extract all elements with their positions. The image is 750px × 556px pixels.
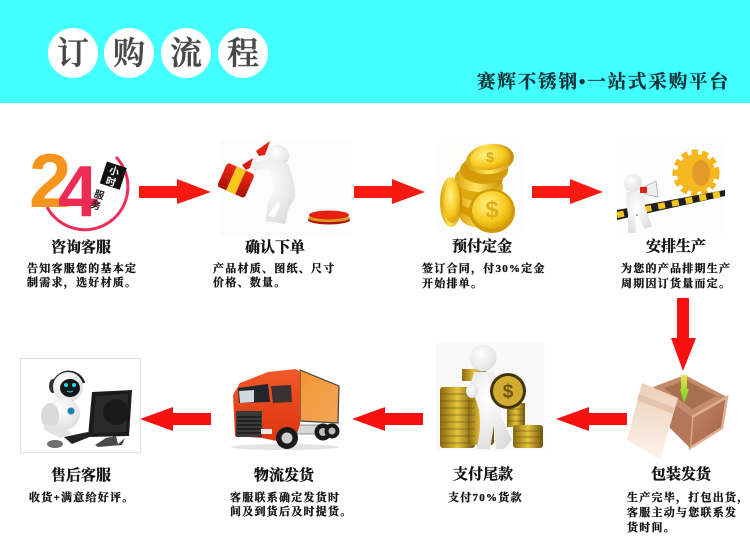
tagline: 赛辉不锈钢•一站式采购平台 [477, 71, 728, 93]
title: 包装发货 [651, 465, 713, 483]
step 7: 物流发货 [230, 369, 352, 518]
description: 开始排单。 [422, 276, 483, 290]
icon: gold coins [438, 141, 524, 233]
heading: 订购流程: 购 [113, 35, 145, 71]
heading: 订购流程: 订 [57, 35, 89, 71]
step 4: 安排生产 [617, 143, 731, 290]
step 6: 支付尾款 [436, 343, 545, 504]
icon: figure with coin stacks: $ [503, 382, 514, 402]
icon: gold coins: $ [486, 149, 494, 165]
icon: 24 hour service: 务 [89, 196, 103, 213]
description: 生产完毕，打包出货， [627, 490, 750, 504]
arrow [354, 179, 425, 204]
heading: 订购流程: 程 [227, 35, 259, 71]
description: 签订合同，付30%定金 [422, 261, 546, 275]
description: 客服主动与您联系发 [627, 505, 737, 519]
title: 预付定金 [452, 237, 512, 255]
arrow [556, 407, 627, 431]
icon: 24 hour service: 时 [104, 172, 118, 189]
icon: figure with hammer [217, 140, 352, 236]
icon: orange truck [231, 369, 340, 450]
step 2: 确认下单 [213, 140, 352, 289]
description: 产品材质、图纸、尺寸 [213, 261, 336, 275]
icon: 24 hour service: 小 [107, 162, 122, 179]
heading: 订购流程 [48, 28, 268, 78]
title: 物流发货 [254, 466, 316, 484]
step 3: 预付定金 [422, 141, 546, 290]
description: 收货+满意给好评。 [29, 490, 135, 504]
arrow [532, 179, 603, 204]
title: 售后客服 [51, 466, 111, 484]
description: 货时间。 [627, 520, 676, 534]
icon: figure with coin stacks [436, 343, 545, 451]
description [230, 490, 352, 518]
description [27, 261, 137, 289]
description [422, 261, 546, 290]
title: 咨询客服 [51, 238, 111, 256]
title: 支付尾款 [453, 465, 513, 483]
icon: wooden crate [627, 375, 727, 460]
heading: 订购流程: 流 [170, 35, 202, 71]
description: 制需求，选好材质。 [27, 275, 137, 289]
icon: green arrow [680, 375, 689, 403]
icon: 24 hour service [29, 139, 128, 232]
icon: robot at computer [20, 358, 140, 452]
title: 安排生产 [646, 237, 706, 255]
description [621, 261, 731, 290]
arrow: down [671, 298, 696, 371]
gear [676, 153, 716, 193]
title: 确认下单 [245, 238, 305, 256]
description: 为您的产品排期生产 [621, 261, 731, 275]
description: 支付70%货款 [448, 490, 523, 504]
icon: 24 hour service: 2 [29, 139, 71, 224]
arrow [352, 407, 423, 431]
arrow [139, 179, 211, 204]
description: 价格、数量。 [213, 275, 286, 289]
icon: gold coins: $ [485, 196, 499, 224]
icon: red button [308, 210, 350, 224]
header band [0, 0, 750, 103]
description: 客服联系确定发货时 [230, 490, 340, 504]
step 8: 售后客服 [20, 358, 140, 504]
icon: 24 hour service: 服 [92, 185, 107, 202]
icon: 24 hour service: 4 [58, 152, 98, 232]
icon: gear, hazard rail and figure with megaphone [617, 143, 725, 233]
description: 告知客服您的基本定 [27, 261, 137, 275]
description: 周期因订货量而定。 [621, 276, 731, 290]
step 1: 咨询客服 [27, 139, 137, 289]
description: 间及到货后及时提货。 [230, 504, 352, 518]
description [213, 261, 336, 289]
arrow [140, 407, 211, 431]
step 5: 包装发货 [627, 375, 750, 534]
description [627, 490, 750, 534]
